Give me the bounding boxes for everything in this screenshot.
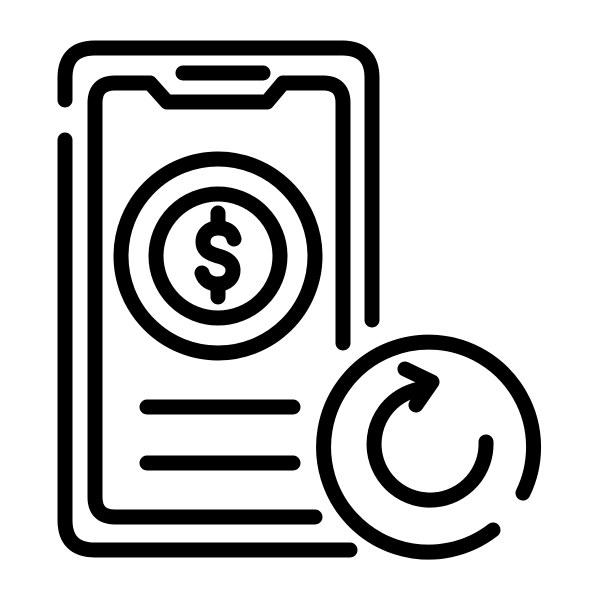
dollar coin (121, 159, 315, 353)
phone outer frame (65, 48, 372, 550)
text lines (147, 407, 293, 463)
speaker (183, 66, 263, 80)
refresh arrow (374, 369, 486, 500)
phone screen with notch (95, 83, 343, 517)
refresh circle (324, 342, 534, 552)
dollar sign (202, 213, 234, 297)
